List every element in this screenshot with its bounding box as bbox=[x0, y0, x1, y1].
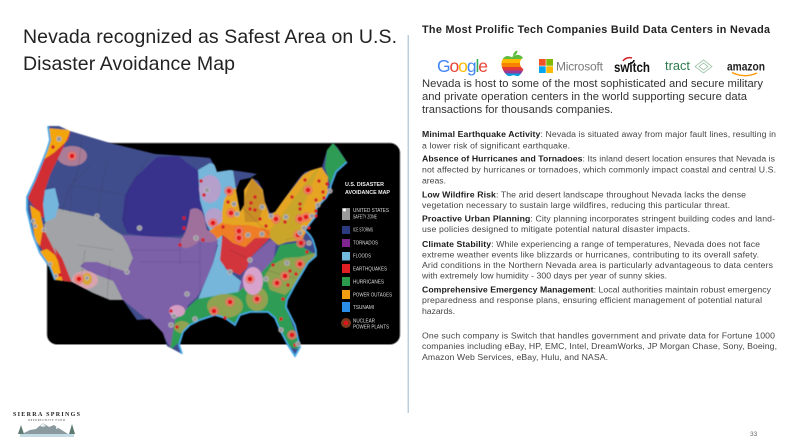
legend: floods: FLOODS bbox=[353, 254, 372, 260]
safety zone markers bbox=[31, 137, 332, 346]
logo: tract: tract bbox=[665, 58, 690, 73]
text: comprehensive emergency management: hazards. bbox=[422, 306, 455, 316]
logo: switch: switch bbox=[614, 60, 650, 75]
map of the United States bbox=[20, 120, 360, 360]
map background bbox=[47, 143, 400, 344]
title bbox=[23, 26, 397, 75]
text: climate stability: with extremely low humidity - 300 days per year of sunny skies. bbox=[421, 270, 667, 280]
legend: safety zone bbox=[342, 208, 390, 220]
text: comprehensive emergency management: preparedness and response plans, ensuring efficient management of potential natural bbox=[422, 295, 762, 305]
legend: hurricanes bbox=[342, 277, 385, 286]
text: switch customers: Amazon Web Services, eBay, Hulu, and NASA. bbox=[422, 352, 608, 362]
text: absence of hurricanes and tornadoes: Absence of Hurricanes and Tornadoes: Its inland desert location ensures that Nevada is bbox=[422, 154, 776, 164]
text: switch customers: One such company is Switch that handles government and private data for Fortune 1000 bbox=[422, 330, 775, 340]
text: proactive urban planning: use policies designed to mitigate potential natural disaster impacts. bbox=[422, 224, 690, 234]
legend: nuclear power plants: NUCLEAR bbox=[353, 318, 375, 324]
text: climate stability: Climate Stability: While experiencing a range of temperatures, Nevada does not face bbox=[422, 239, 760, 249]
legend title bbox=[345, 182, 390, 196]
title: Disaster Avoidance Map bbox=[23, 53, 235, 75]
text: switch customers: companies including eBay, HP, EMC, Intel, DreamWorks, JP Morgan Chase, Sony, Boeing, bbox=[422, 341, 777, 351]
text: comprehensive emergency management bbox=[422, 284, 772, 316]
text: absence of hurricanes and tornadoes bbox=[422, 154, 776, 186]
text: climate stability: Arid conditions in the Northern Nevada area is particularly advantageous to data centers bbox=[422, 260, 774, 270]
logo: Sierra Springs Opportunity Fund: SIERRA SPRINGS bbox=[13, 412, 81, 418]
text: proactive urban planning: Proactive Urban Planning: City planning incorporates stringent building codes and land- bbox=[422, 214, 775, 224]
heading: tech companies: The Most Prolific Tech Companies Build Data Centers in Nevada bbox=[422, 24, 771, 36]
state lines bbox=[62, 137, 305, 298]
legend: tornados: TORNADOS bbox=[353, 240, 379, 246]
text: minimal earthquake activity: a lower risk of significant earthquake. bbox=[422, 140, 570, 150]
text: climate stability: extreme weather events like blizzards or hurricanes, contributing to its overall safety. bbox=[422, 250, 759, 260]
legend: tsunami bbox=[342, 302, 374, 312]
legend: ice storms bbox=[342, 226, 373, 234]
intro paragraph: Nevada is host to some of the most sophisticated and secure military bbox=[422, 78, 763, 90]
text: low wildfire risk: Low Wildfire Risk: The arid desert landscape throughout Nevada lacks the dense bbox=[422, 190, 746, 200]
legend: tsunami: TSUNAMI bbox=[353, 305, 374, 311]
legend: earthquakes: EARTHQUAKES bbox=[353, 266, 388, 272]
tsunami coastline bbox=[27, 126, 347, 356]
text: comprehensive emergency management: Comprehensive Emergency Management: Local authorities maintain robust emergency bbox=[422, 284, 772, 294]
text: absence of hurricanes and tornadoes: areas. bbox=[422, 176, 446, 186]
legend: nuclear power plants: POWER PLANTS bbox=[353, 324, 390, 330]
legend: safety zone: UNITED STATES bbox=[353, 208, 390, 214]
divider bbox=[408, 35, 409, 413]
legend: power outages: POWER OUTAGES bbox=[353, 292, 393, 298]
intro paragraph: transactions for thousands companies. bbox=[422, 104, 613, 116]
logo: Microsoft: Microsoft bbox=[556, 60, 604, 74]
legend: power outages bbox=[342, 290, 393, 299]
nuclear power plants: large bbox=[68, 152, 312, 340]
panel: disaster avoidance map bbox=[20, 120, 400, 360]
logo: Apple bbox=[502, 50, 524, 76]
text: switch customers bbox=[422, 330, 777, 362]
legend: floods bbox=[342, 252, 372, 260]
page number: 33 bbox=[750, 431, 758, 438]
logo: Google: Google bbox=[437, 56, 488, 76]
company logos bbox=[437, 50, 765, 78]
legend: earthquakes bbox=[342, 264, 388, 273]
legend: nuclear power plants bbox=[341, 318, 390, 330]
legend bbox=[341, 182, 393, 330]
text: proactive urban planning bbox=[422, 214, 775, 234]
text: low wildfire risk bbox=[422, 190, 746, 210]
legend: ice storms: ICE STORMS bbox=[353, 228, 373, 234]
legend: tornados bbox=[342, 239, 379, 247]
legend: hurricanes: HURRICANES bbox=[353, 280, 385, 286]
legend title: AVOIDANCE MAP bbox=[345, 190, 390, 196]
intro paragraph bbox=[422, 78, 763, 116]
title: Nevada recognized as Safest Area on U.S. bbox=[23, 26, 397, 48]
logo: tract bbox=[665, 58, 712, 73]
legend title: U.S. DISASTER bbox=[345, 182, 384, 188]
text: minimal earthquake activity: Minimal Earthquake Activity: Nevada is situated away from major fault lines, resulting in bbox=[422, 129, 776, 139]
intro paragraph: and private operation centers in the world supporting secure data bbox=[422, 91, 748, 103]
logo: Sierra Springs Opportunity Fund bbox=[13, 412, 81, 437]
text: climate stability bbox=[421, 239, 774, 280]
nuclear power plants: small bbox=[51, 145, 329, 347]
legend: safety zone: SAFETY ZONE bbox=[353, 214, 377, 220]
logo: amazon: amazon bbox=[727, 62, 765, 74]
text: low wildfire risk: vegetation necessary to sustain large wildfires, reducing this particular threat. bbox=[422, 200, 730, 210]
logo: Sierra Springs Opportunity Fund: OPPORTUNITY FUND bbox=[28, 419, 65, 422]
text: minimal earthquake activity bbox=[422, 129, 776, 150]
text: absence of hurricanes and tornadoes: not affected by hurricanes or tornadoes, which commonly impact coastal and central U.S. bbox=[422, 164, 776, 174]
